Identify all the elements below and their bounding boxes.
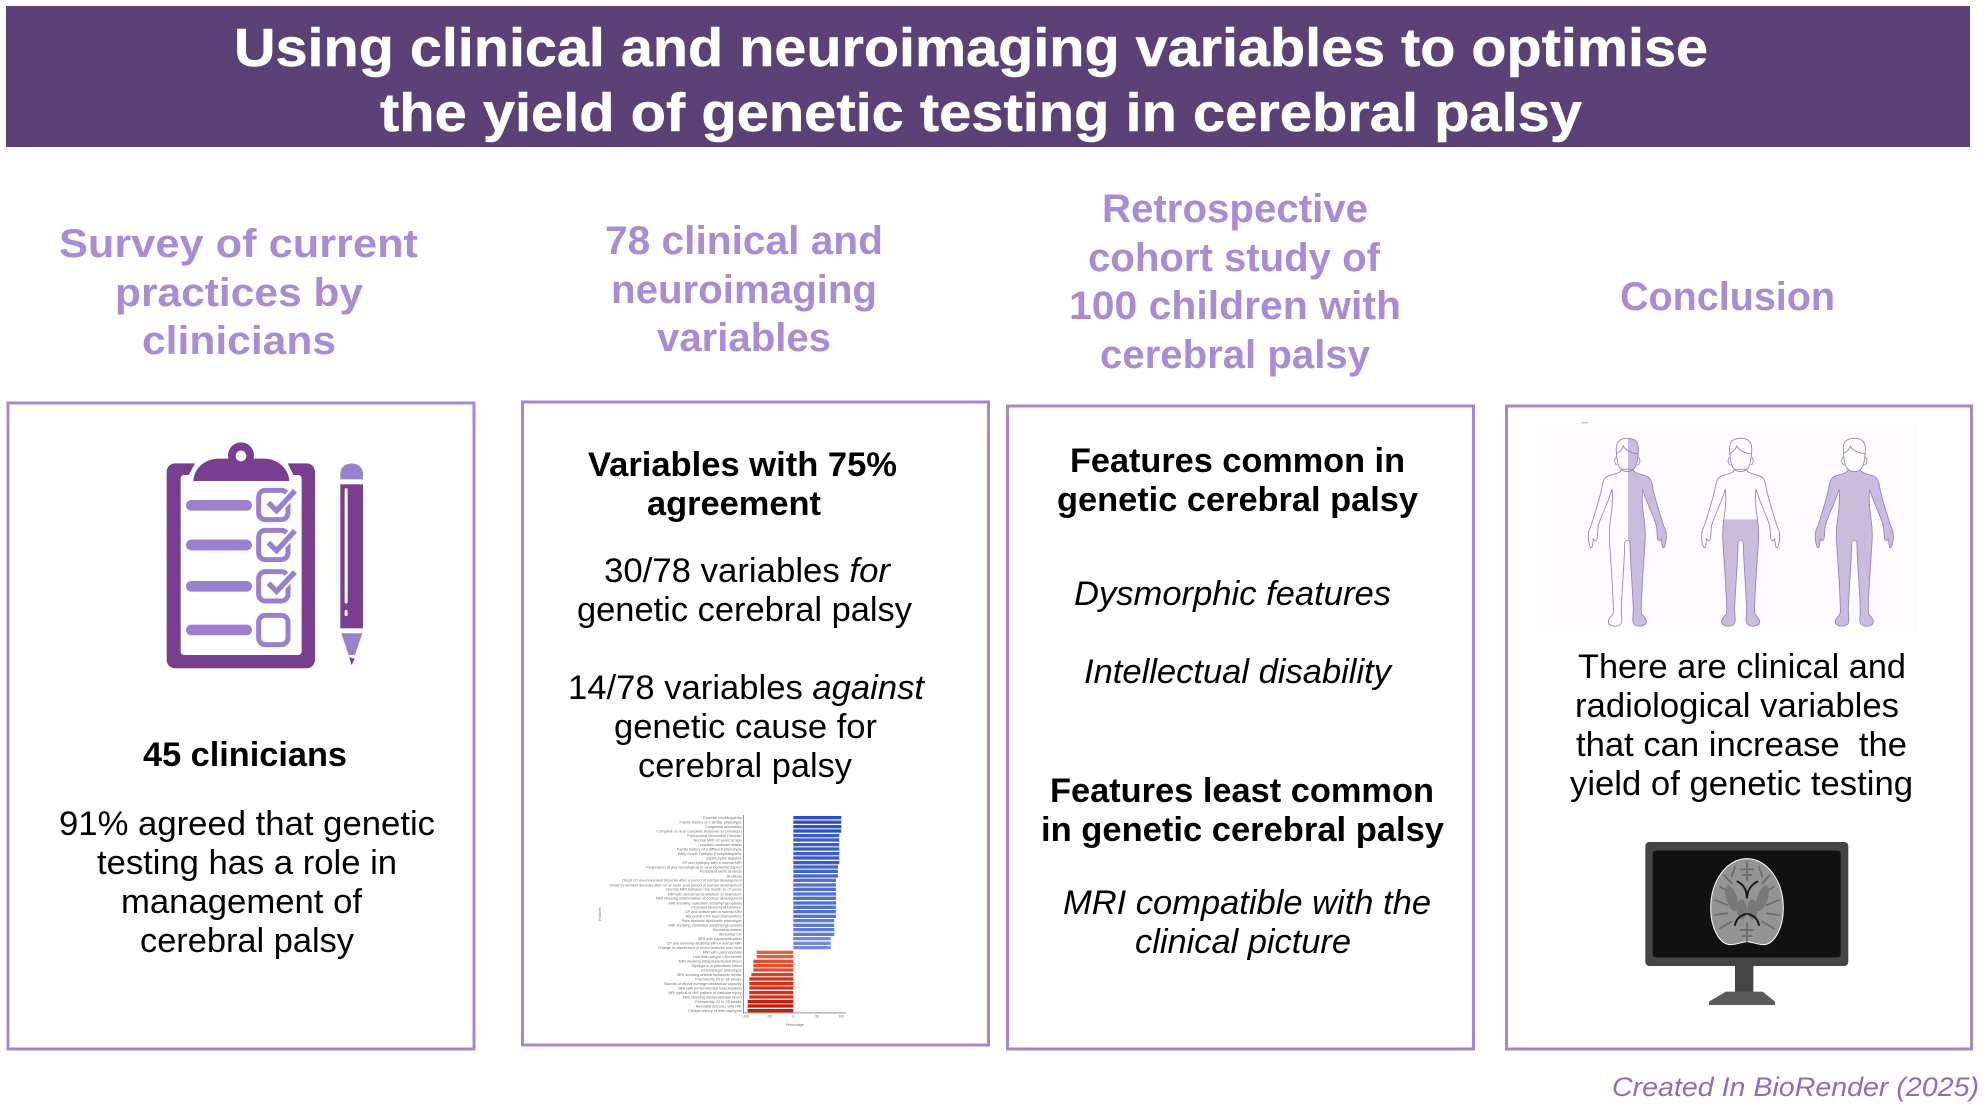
text: variables heading: agreement xyxy=(647,485,822,523)
chart feature labels: Areflexia xyxy=(727,874,743,878)
text: features least common heading: in genetic cerebral palsy xyxy=(1041,811,1444,849)
chart feature labels: Family history of a similar phenotype xyxy=(680,820,742,824)
text: conclusion statement: yield of genetic testing xyxy=(1570,765,1913,803)
panel: survey of clinicians xyxy=(8,403,474,1049)
chart axis ticks and titles: Features xyxy=(598,907,602,921)
heading: variables: 78 clinical and xyxy=(605,219,883,263)
heading: retrospective cohort xyxy=(1069,187,1401,377)
chart axis ticks and titles: 0 xyxy=(792,1014,794,1018)
chart bars: against genetic cause xyxy=(748,951,793,1012)
heading: retrospective cohort: Retrospective xyxy=(1102,187,1368,231)
text: conclusion statement: radiological variables xyxy=(1575,687,1899,725)
chart feature labels: MRI showing intraventricular bleed xyxy=(683,995,742,999)
chart feature labels: Onset of non-movement disorder after a period of normal development xyxy=(622,879,743,883)
chart feature labels: Regression of any neurological or developmental aspect xyxy=(646,865,743,869)
chart axis ticks and titles xyxy=(598,907,844,1027)
chart axis ticks and titles: -100 xyxy=(742,1014,749,1018)
text: features least common heading: Features least common xyxy=(1050,772,1434,810)
chart feature labels: CP and learning disability with a normal MRI xyxy=(667,942,742,946)
text: variables for: genetic cerebral palsy xyxy=(577,591,913,629)
chart feature labels: Complete or near complete response to Levodopa xyxy=(657,829,743,833)
illustration: three child body figures xyxy=(1582,422,1894,627)
heading: survey: Survey of current xyxy=(59,222,418,266)
text: conclusion statement: that can increase the xyxy=(1576,726,1907,764)
chart feature labels xyxy=(609,816,743,1013)
chart feature labels: Parental consanguinity xyxy=(703,816,742,820)
panel: conclusion xyxy=(1506,406,1972,1049)
chart feature labels: Family history of a different phenotype xyxy=(677,847,742,851)
chart feature labels: Paroxysmal Movement Disorder xyxy=(687,834,742,838)
text: 45 clinicians: 45 clinicians xyxy=(143,736,347,774)
chart feature labels: MRI showing arterial ischaemic stroke xyxy=(677,973,742,977)
chart feature labels: MRI showing intraparenchymal bleed xyxy=(679,960,742,964)
heading: variables xyxy=(605,219,883,360)
text: variables heading xyxy=(588,446,897,523)
heading: variables: variables xyxy=(657,316,831,360)
chart feature labels: MRI showing cerebellar atrophy/hypoplasia xyxy=(668,924,743,928)
text: dysmorphic features: Dysmorphic features xyxy=(1074,575,1391,613)
text: variables against xyxy=(568,669,925,785)
chart axis ticks and titles: 50 xyxy=(815,1014,819,1018)
text: survey finding: 91% agreed that genetic xyxy=(59,805,435,843)
heading: retrospective cohort: 100 children with xyxy=(1069,284,1401,328)
title line 1: Using clinical and neuroimaging variables to optimise xyxy=(234,18,1708,78)
chart feature labels: Neonatal seizures with HIE xyxy=(696,1004,742,1008)
heading: retrospective cohort: cerebral palsy xyxy=(1100,333,1371,377)
text: conclusion statement: There are clinical and xyxy=(1578,648,1906,686)
title banner xyxy=(6,6,1970,147)
chart bars: for genetic cause xyxy=(793,816,841,949)
credit: Created In BioRender (2025) xyxy=(1612,1072,1979,1102)
chart feature labels: Clinical history of birth asphyxia xyxy=(688,1009,743,1013)
text: variables against: genetic cause for xyxy=(614,708,877,746)
chart feature labels: Dysmorphic features xyxy=(707,856,742,860)
chart axis ticks and titles: Percentage xyxy=(786,1023,804,1027)
text: survey finding: cerebral palsy xyxy=(140,922,355,960)
panel: retrospective cohort findings xyxy=(1008,406,1474,1049)
heading: survey xyxy=(59,222,418,363)
chart feature labels: Isolated dominant ataxia xyxy=(700,843,743,847)
text: survey finding xyxy=(59,805,435,960)
figure: hemiplegia xyxy=(1588,438,1666,626)
chart feature labels: MRI with porencephaly xyxy=(703,951,742,955)
chart axes xyxy=(743,815,846,1013)
text: MRI compatible: clinical picture xyxy=(1135,923,1351,961)
text: variables against: cerebral palsy xyxy=(638,747,853,785)
chart feature labels: Congenital anomalies xyxy=(705,825,742,829)
icon: clipboard checklist and pencil xyxy=(167,442,363,668)
heading: variables: neuroimaging xyxy=(611,268,877,312)
chart feature labels: MRI showing malformation of cortical development xyxy=(656,897,743,901)
chart feature labels: MRI with hypomyelination xyxy=(698,937,742,941)
text: variables for xyxy=(577,552,913,629)
chart feature labels: Low birth weight <3rd centile xyxy=(693,955,742,959)
chart feature labels: Normal MRI >2 years of age xyxy=(694,838,742,842)
text: survey finding: management of xyxy=(121,883,362,921)
chart feature labels: MRI with periventricular leukomalacia xyxy=(678,986,743,990)
title line 2: the yield of genetic testing in cerebral palsy xyxy=(380,83,1582,143)
text: variables against: 14/78 variables against xyxy=(568,669,925,707)
heading: survey: clinicians xyxy=(142,319,336,363)
text: intellectual disability: Intellectual disability xyxy=(1084,653,1393,691)
heading: retrospective cohort: cohort study of xyxy=(1088,236,1381,280)
figure: quadriplegia xyxy=(1815,438,1893,626)
chart feature labels: Prematurity 23 to 28 weeks xyxy=(695,1000,742,1004)
chart feature labels: MRI typical of HIE pattern of vascular injury xyxy=(668,991,742,995)
text: MRI compatible xyxy=(1063,884,1431,961)
chart feature labels: Early Onset Epileptic Encephalopathy xyxy=(678,852,742,856)
chart feature labels: Abnormal CK xyxy=(719,933,742,937)
chart feature labels: Diplegia in a premature infant xyxy=(692,964,743,968)
chart axis ticks and titles: -50 xyxy=(767,1014,772,1018)
chart feature labels: A hemiplegic phenotype xyxy=(701,968,742,972)
heading: survey: practices by xyxy=(115,271,364,315)
text: features least common heading xyxy=(1041,772,1444,849)
chart feature labels: CP and epilepsy with a normal MRI xyxy=(682,861,742,865)
text: conclusion statement xyxy=(1570,648,1913,803)
text: features common heading: genetic cerebral palsy xyxy=(1057,481,1418,519)
chart feature labels: Persistent lactic acidosis xyxy=(700,870,742,874)
text: features common heading: Features common in xyxy=(1070,442,1405,480)
icon: monitor showing brain MRI xyxy=(1645,842,1848,1005)
chart feature labels: Abnormal CSF neurotransmitters xyxy=(686,915,742,919)
text: features common heading xyxy=(1057,442,1418,519)
chart feature labels: MRI showing brainstem atrophy/hypoplasia xyxy=(668,901,743,905)
chart feature labels: MRI with abnormal cerebellum or brainstem xyxy=(668,892,742,896)
figure: diplegia xyxy=(1702,438,1780,626)
text: MRI compatible: MRI compatible with the xyxy=(1063,884,1431,922)
chart feature labels: Prematurity 29 to 36 weeks xyxy=(695,977,742,981)
chart feature labels: Normal or above average intellectual capacity xyxy=(664,982,742,986)
chart feature labels: Change in distribution of motor features over time xyxy=(658,946,742,950)
text: variables heading: Variables with 75% xyxy=(588,446,897,484)
text: variables for: 30/78 variables for xyxy=(604,552,892,590)
chart feature labels: Fluctuant Movement Disorder xyxy=(691,906,742,910)
bar chart: agreement percentage by feature xyxy=(598,815,846,1027)
heading: conclusion: Conclusion xyxy=(1620,275,1835,319)
chart feature labels: Onset movement disorder after >2 or more year period of normal development xyxy=(609,883,743,887)
text: survey finding: testing has a role in xyxy=(97,844,397,882)
chart feature labels: Abnormal lactate xyxy=(713,928,742,932)
panel: variables xyxy=(522,402,988,1045)
chart feature labels: Normal MRI between one month to <2 years xyxy=(666,888,742,892)
chart feature labels: Pure dystonic dyskinetic phenotype xyxy=(682,919,742,923)
brain scan xyxy=(1711,859,1783,945)
chart axis ticks and titles: 100 xyxy=(838,1014,844,1018)
chart feature labels: CP and autism with a normal MRI xyxy=(685,910,742,914)
